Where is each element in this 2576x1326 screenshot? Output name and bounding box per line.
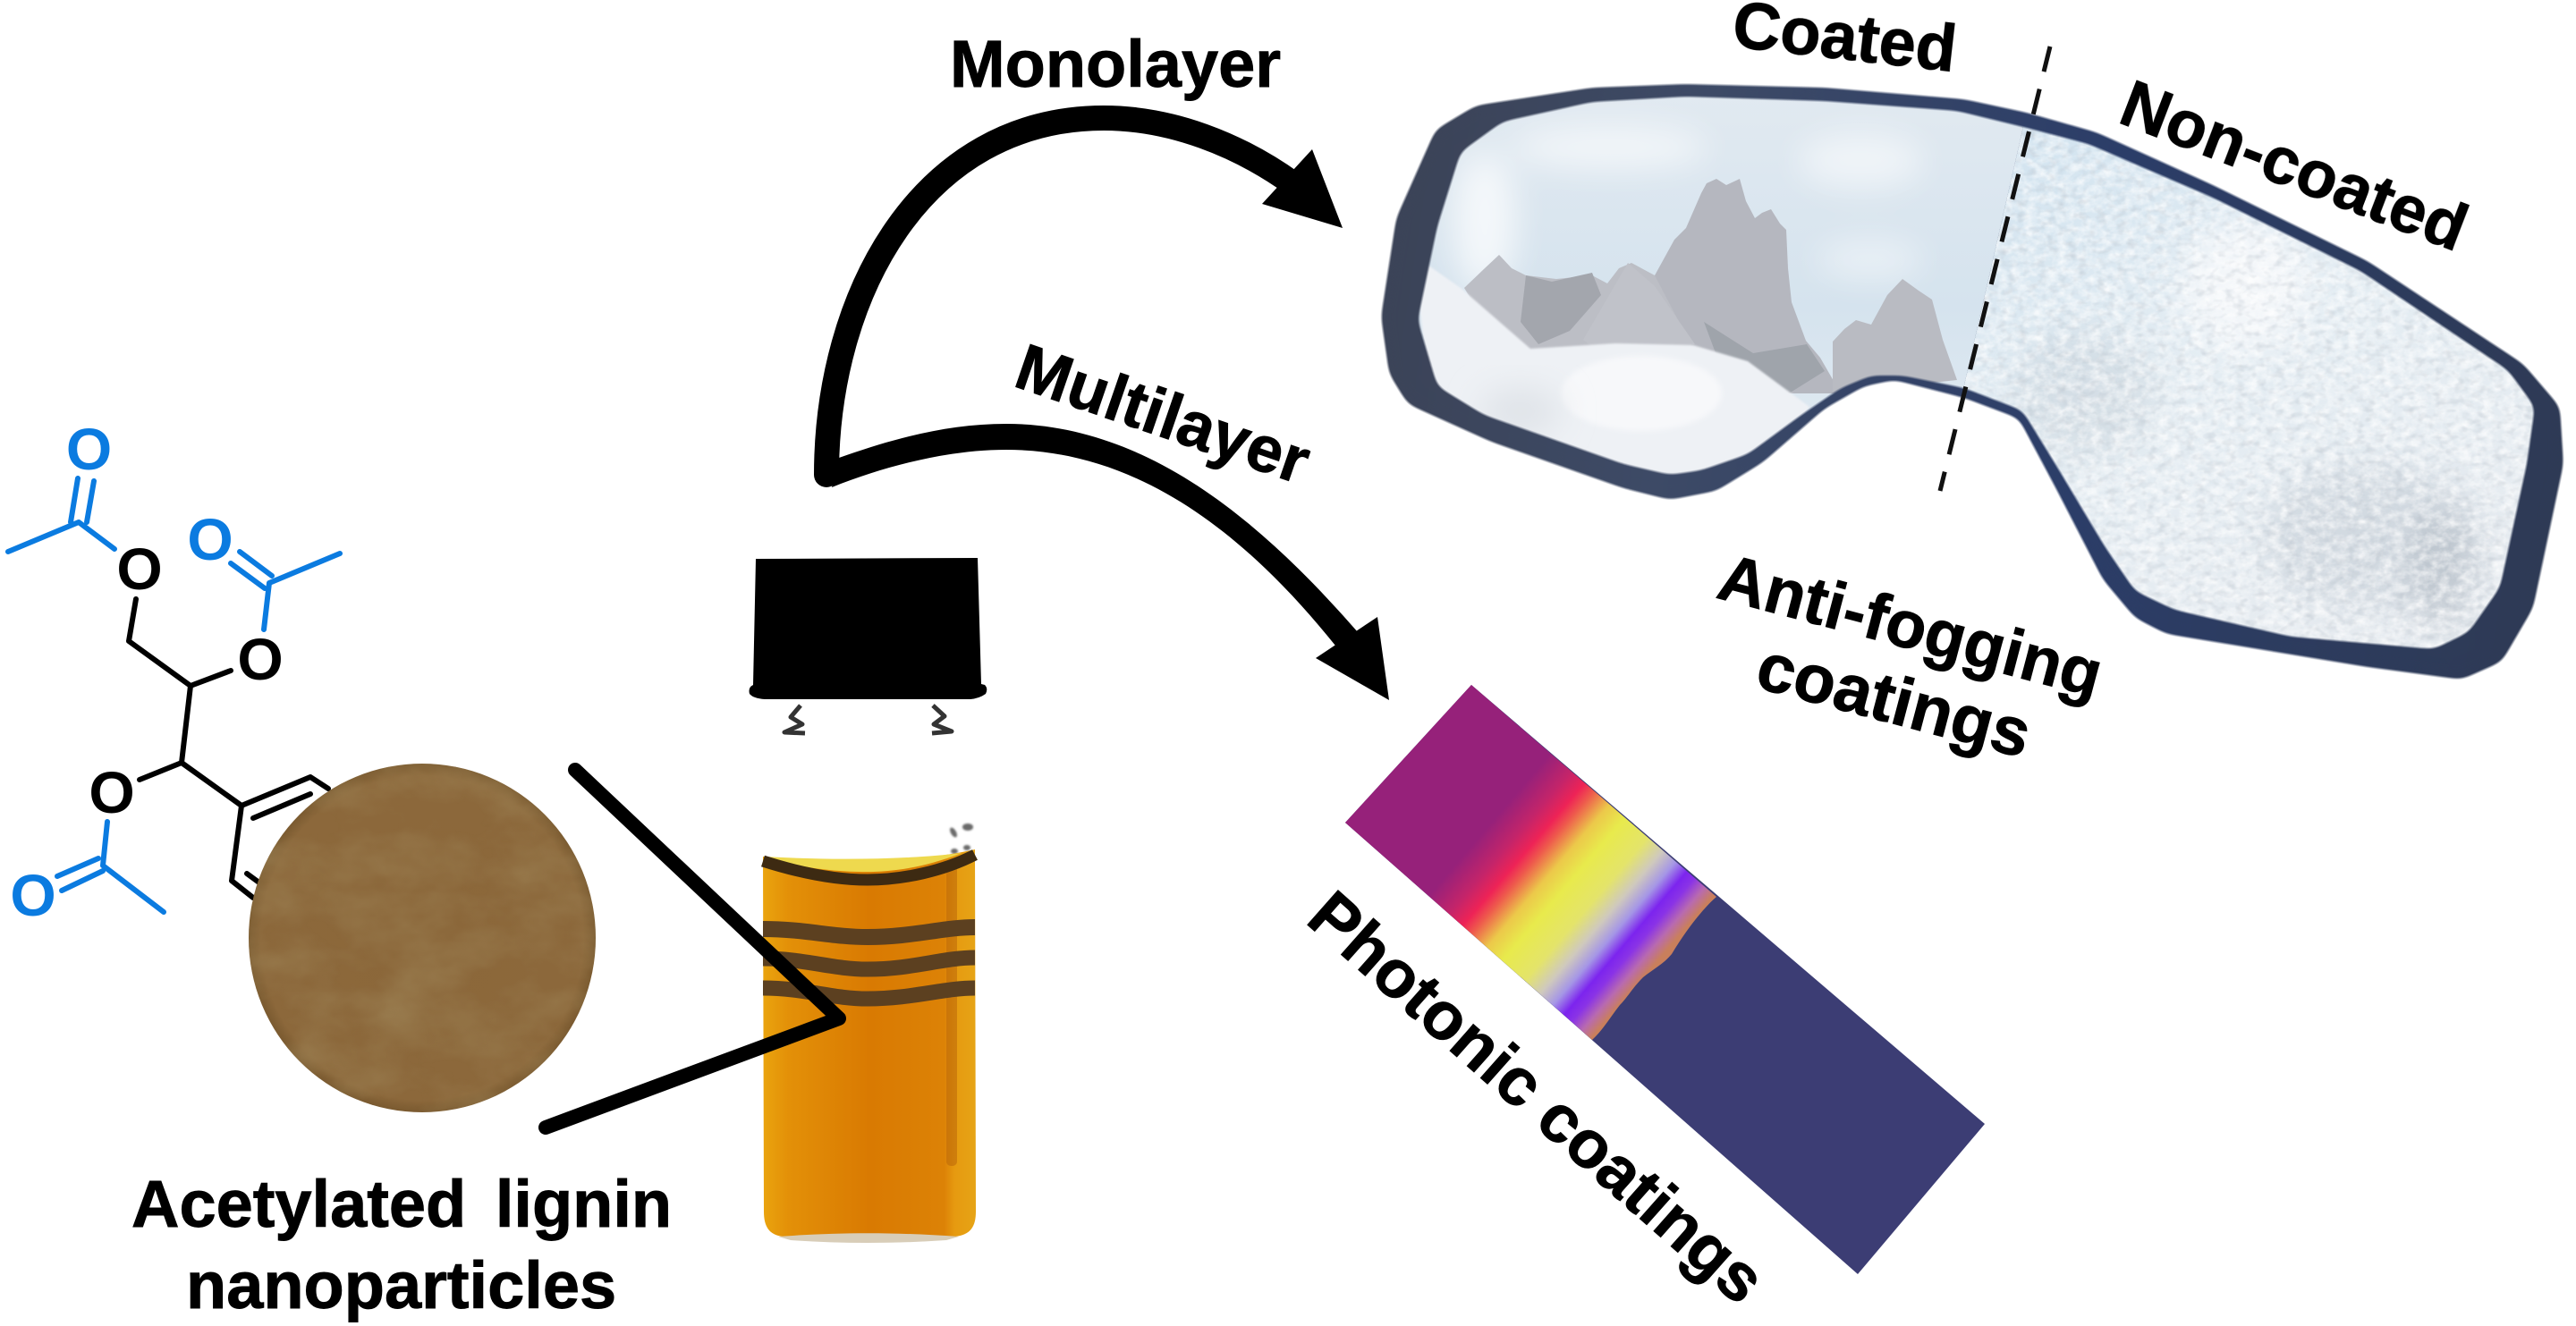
pointer lines from vial to nanoparticle xyxy=(546,770,839,1128)
label: Acetylated lignin nanoparticles xyxy=(131,1167,672,1322)
label: Non-coated: Non-coated xyxy=(2111,65,2478,266)
label: Multilayer: Multilayer xyxy=(1007,331,1318,498)
oxygen atom labels: O xyxy=(237,626,284,692)
snow slopes xyxy=(1420,266,1809,474)
label: Acetylated lignin nanoparticles: Acetylated lignin xyxy=(131,1167,672,1241)
goggles xyxy=(1381,46,2563,680)
oxygen atom labels: O xyxy=(10,862,56,928)
oxygen atom labels: O xyxy=(187,506,233,572)
oxygen atom labels: O xyxy=(66,416,112,482)
bubbles near liquid surface xyxy=(948,823,973,854)
chemical structure: acetylated lignin molecule xyxy=(8,416,340,928)
goggle frame xyxy=(1381,84,2563,680)
arrow: monolayer xyxy=(826,118,1343,475)
clouds xyxy=(1453,126,1923,295)
dark meniscus and band layers xyxy=(763,855,975,999)
label: Photonic coatings: Photonic coatings xyxy=(1294,876,1780,1318)
coated lens: clear mountain view xyxy=(1418,96,2535,649)
photonic coating strip xyxy=(1345,685,1985,1274)
label: Anti-fogging coatings: coatings xyxy=(1750,628,2039,773)
dashed divider xyxy=(1940,46,2050,491)
arrow: multilayer xyxy=(832,424,1389,700)
glass base xyxy=(778,1233,959,1243)
vial xyxy=(750,558,987,1243)
label: Anti-fogging coatings: Anti-fogging xyxy=(1711,539,2110,712)
black backbone bonds xyxy=(129,599,328,898)
vial cap xyxy=(750,558,987,733)
oxygen atom labels: O xyxy=(116,536,163,602)
mountain range xyxy=(1464,179,1957,393)
blue acetyl bonds xyxy=(8,478,340,912)
nanoparticle disc xyxy=(249,764,596,1112)
amber liquid xyxy=(763,849,976,1243)
oxygen atom labels: O xyxy=(89,759,135,825)
oxygen atom labels xyxy=(10,416,284,928)
label: Acetylated lignin nanoparticles: nanoparticles xyxy=(186,1248,616,1322)
vial side reflection strip xyxy=(946,862,957,1166)
label: Monolayer: Monolayer xyxy=(950,27,1281,101)
non-coated lens: frosted view xyxy=(1964,126,2535,649)
